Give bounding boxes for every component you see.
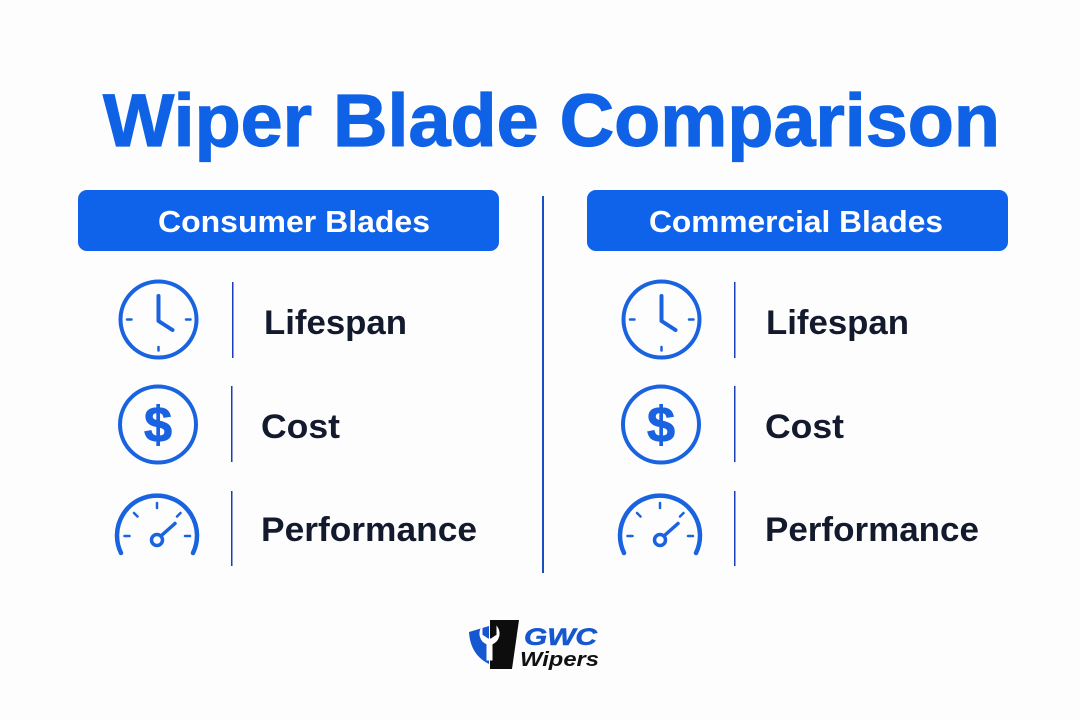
heading: commercial blades (587, 190, 1008, 251)
divider line (232, 282, 234, 358)
icon: dollar (623, 386, 699, 462)
label: lifespan: Lifespan (766, 304, 909, 342)
icon: dollar (120, 386, 196, 462)
icon: clock (120, 282, 196, 358)
panel: commercial blades (587, 190, 1008, 566)
logo: GWC Wipers (469, 620, 599, 671)
label: performance: Performance (261, 511, 477, 549)
divider line (734, 386, 736, 462)
logo text: Wipers: Wipers (520, 649, 599, 671)
divider line (231, 491, 232, 566)
divider line (231, 386, 232, 462)
title: Wiper Blade Comparison (103, 79, 1000, 162)
label: cost: Cost (261, 408, 340, 446)
icon: dollar: $ (144, 397, 172, 453)
label: performance: Performance (765, 511, 979, 549)
divider line (734, 282, 736, 358)
logo text: GWC: GWC (524, 624, 598, 651)
panel: consumer blades (78, 190, 499, 566)
heading: consumer blades: Consumer Blades (158, 204, 430, 239)
icon: dollar: $ (647, 397, 675, 453)
center divider (542, 196, 544, 573)
heading: consumer blades (78, 190, 499, 251)
label: cost: Cost (765, 408, 844, 446)
divider line (734, 491, 736, 566)
icon: gauge (620, 496, 700, 553)
label: lifespan: Lifespan (264, 304, 407, 342)
icon: gauge (117, 496, 197, 553)
icon: shield with wrench (469, 620, 519, 669)
icon: clock (624, 282, 700, 358)
heading: commercial blades: Commercial Blades (649, 204, 943, 239)
